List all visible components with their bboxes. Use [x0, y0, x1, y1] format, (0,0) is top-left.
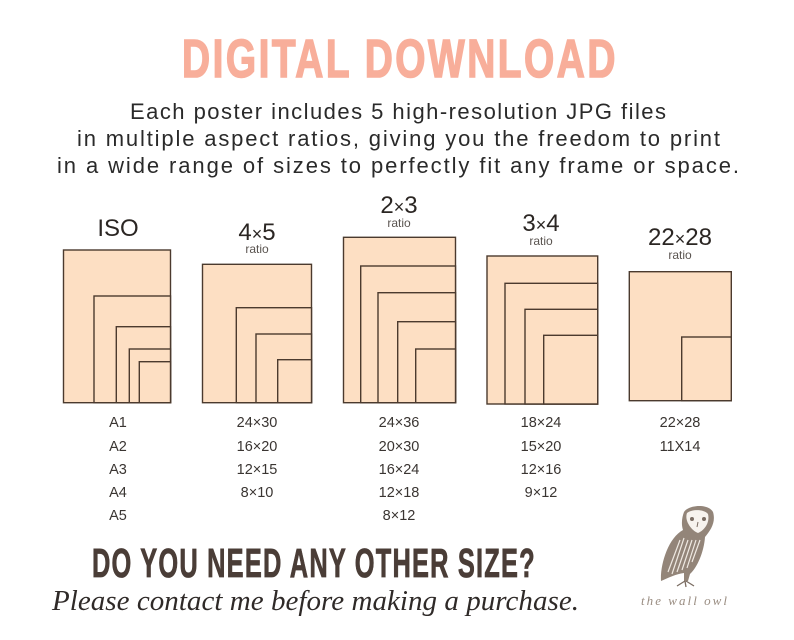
size list: 3x4: 18×24 — [521, 415, 561, 431]
label: ratio: ratio — [529, 234, 553, 248]
subheading: other size question: DO YOU NEED ANY OTHER SIZE? — [92, 541, 535, 587]
size list: 2x3: 8×12 — [383, 508, 415, 524]
size list: ISO: A4 — [109, 485, 127, 501]
size list: 4x5 — [237, 415, 277, 501]
label: ratio: ratio — [387, 216, 411, 230]
size list: 4x5: 24×30 — [237, 415, 277, 431]
diagram: 4x5 nested rectangles — [202, 264, 312, 403]
size list: ISO: A2 — [109, 439, 127, 455]
diagram: 22x28 nested rectangles — [629, 272, 731, 401]
icon: owl logo — [661, 506, 714, 587]
heading: ISO: ISO — [97, 215, 139, 242]
heading: 2x3: 2×3 — [380, 192, 418, 219]
size list: ISO: A3 — [109, 462, 127, 478]
size list: 4x5: 12×15 — [237, 462, 277, 478]
label: ratio: ratio — [668, 248, 692, 262]
size list: 2x3: 16×24 — [379, 462, 419, 478]
heading: 3x4: 3×4 — [522, 210, 560, 237]
size list: ISO — [109, 415, 127, 524]
intro text block — [57, 99, 739, 178]
size list: 3x4 — [521, 415, 561, 501]
panel: ISO — [64, 215, 170, 524]
intro text block: in a wide range of sizes to perfectly fit any frame or space. — [57, 153, 739, 178]
panel: 4x5 ratio — [202, 219, 312, 501]
heading: 4x5: 4×5 — [238, 219, 276, 246]
heading: 22x28: 22×28 — [648, 224, 712, 251]
size list: 22x28: 22×28 — [660, 415, 700, 431]
panel: 2x3 ratio — [344, 192, 456, 524]
intro text block: in multiple aspect ratios, giving you the freedom to print — [77, 126, 720, 151]
size list: 3x4: 9×12 — [525, 485, 557, 501]
size list: 2x3: 20×30 — [379, 439, 419, 455]
title: DIGITAL DOWNLOAD — [182, 28, 615, 88]
logo text: the wall owl — [641, 593, 727, 608]
size list: ISO: A1 — [109, 415, 127, 431]
size list: 2x3 — [379, 415, 419, 524]
diagram: 3x4 nested rectangles — [487, 256, 598, 404]
size list: 22x28: 11X14 — [660, 439, 700, 455]
size list: 2x3: 12×18 — [379, 485, 419, 501]
panel: 3x4 ratio — [487, 210, 598, 501]
size list: 3x4: 15×20 — [521, 439, 561, 455]
size list: ISO: A5 — [109, 508, 127, 524]
size list: 4x5: 16×20 — [237, 439, 277, 455]
size list: 2x3: 24×36 — [379, 415, 419, 431]
diagram: ISO nested rectangles — [64, 250, 170, 403]
size list: 3x4: 12×16 — [521, 462, 561, 478]
panel: 22x28 ratio — [629, 224, 731, 455]
size list: 22x28 — [660, 415, 700, 455]
size list: 4x5: 8×10 — [241, 485, 273, 501]
diagram: 2x3 nested rectangles — [344, 237, 456, 403]
contact note: Please contact me before making a purchase. — [51, 585, 579, 617]
intro text block: Each poster includes 5 high-resolution JPG files — [130, 99, 666, 124]
label: ratio: ratio — [245, 242, 269, 256]
